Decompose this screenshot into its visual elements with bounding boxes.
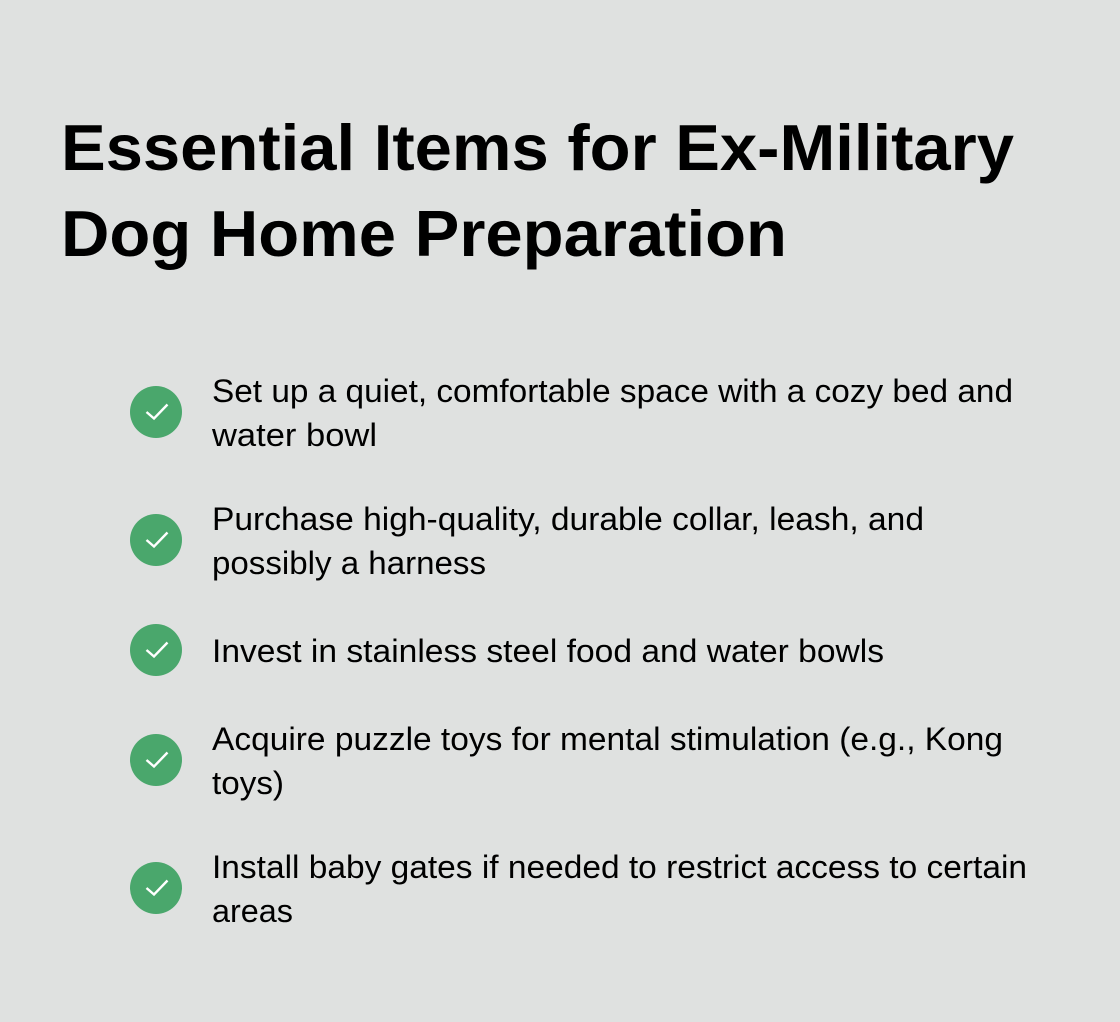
icon: green check circle <box>130 624 182 676</box>
item 5: baby gates <box>130 849 1027 929</box>
icon: green check circle <box>130 862 182 914</box>
item 3 text: Invest in stainless steel food and water bowls <box>212 633 884 669</box>
item 2 text: possibly a harness <box>212 545 486 581</box>
item 5 text: Install baby gates if needed to restrict access to certain <box>212 849 1027 885</box>
item 3: bowls <box>130 624 884 676</box>
title: Essential Items for Ex-Military <box>61 111 1014 184</box>
item 1 text: Set up a quiet, comfortable space with a cozy bed and <box>212 373 1013 409</box>
item 2 text <box>212 501 924 581</box>
checklist <box>130 373 1027 929</box>
item 1 text: water bowl <box>211 417 377 453</box>
title <box>61 111 1014 270</box>
item 4 text <box>212 721 1003 801</box>
title: Dog Home Preparation <box>61 197 787 270</box>
item 2 text: Purchase high-quality, durable collar, leash, and <box>212 501 924 537</box>
icon: green check circle <box>130 386 182 438</box>
item 2: collar and leash <box>130 501 924 581</box>
item 4 text: toys) <box>212 765 284 801</box>
icon: green check circle <box>130 514 182 566</box>
item 4 text: Acquire puzzle toys for mental stimulation (e.g., Kong <box>212 721 1003 757</box>
item 4: puzzle toys <box>130 721 1003 801</box>
item 5 text: areas <box>212 893 293 929</box>
item 1 text <box>211 373 1013 453</box>
icon: green check circle <box>130 734 182 786</box>
item 1: quiet space <box>130 373 1013 453</box>
item 5 text <box>212 849 1027 929</box>
